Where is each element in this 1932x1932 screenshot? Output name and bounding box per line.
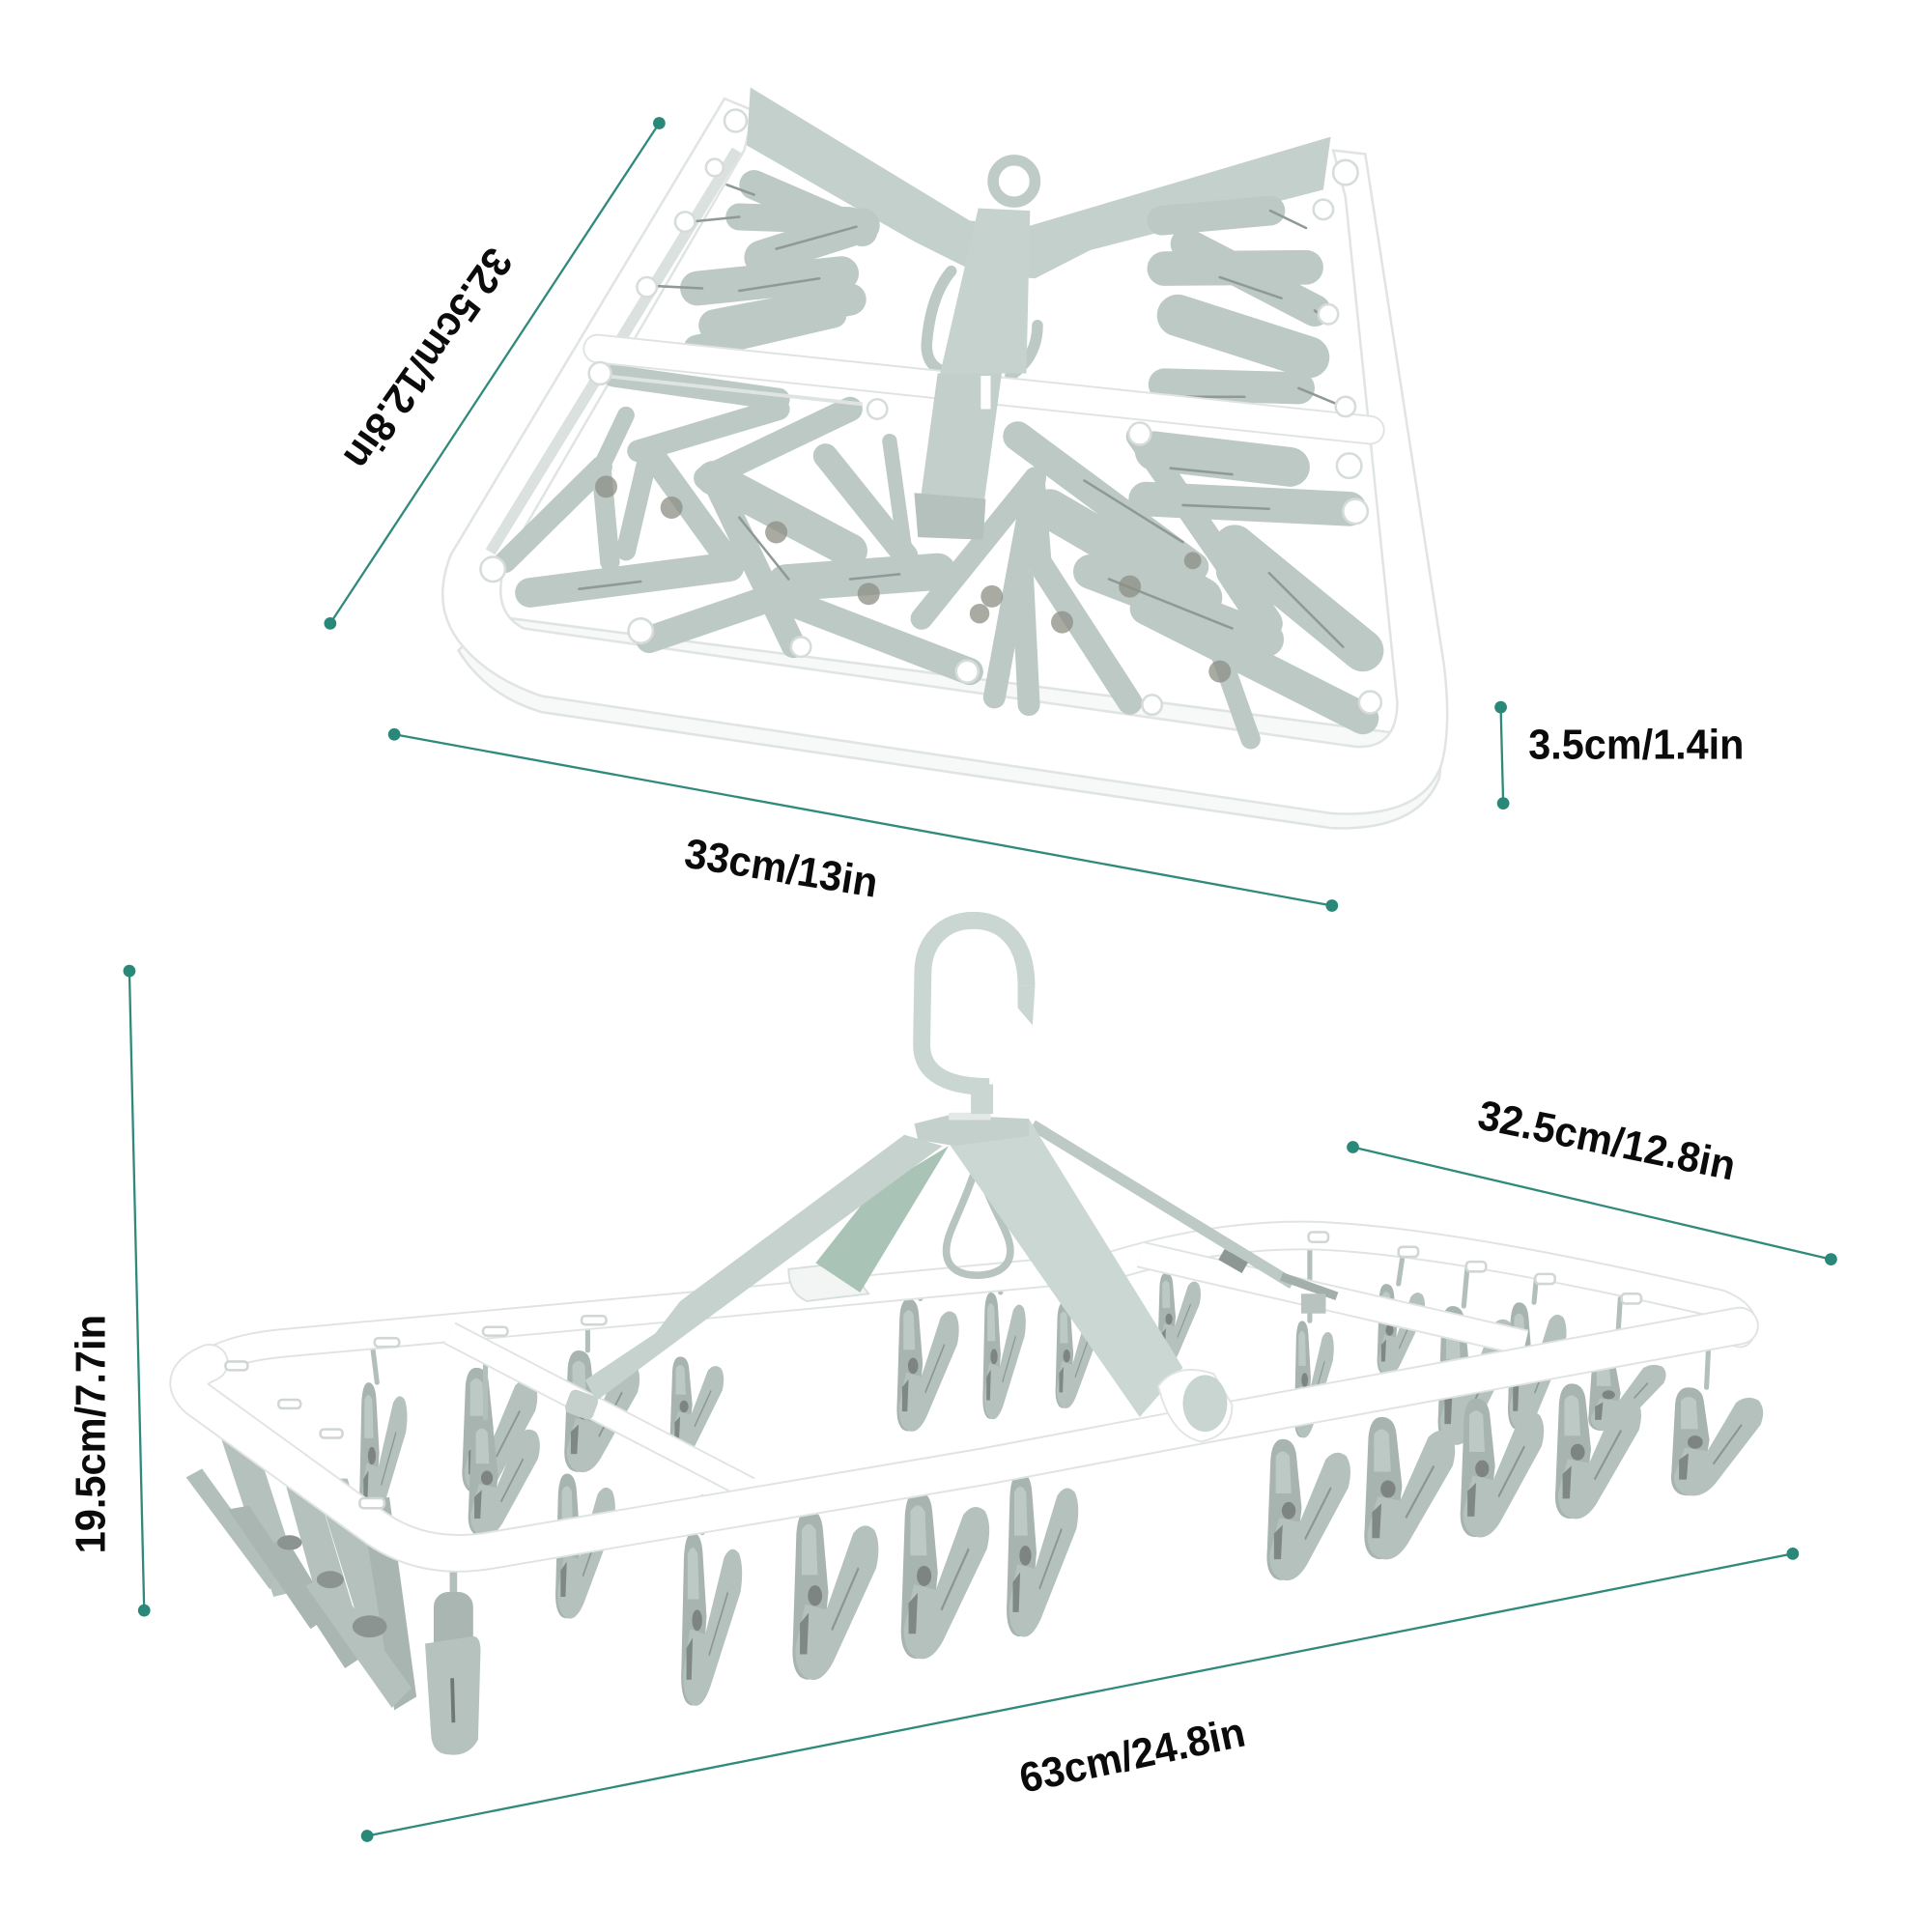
end cap on divider <box>563 1388 600 1421</box>
folded frame <box>442 99 1447 813</box>
teardrop loop <box>947 1164 1010 1275</box>
product: folded hanger (top) <box>442 88 1447 828</box>
large hook <box>922 921 1035 1114</box>
left side clips <box>186 1430 416 1710</box>
divider bars <box>450 1254 1525 1489</box>
dimension: open width 63cm <box>361 1548 1799 1842</box>
back row clips <box>359 1273 1666 1536</box>
second thin rail under cross bar <box>604 376 863 404</box>
dimension: open height 19.5cm <box>68 965 151 1616</box>
thin rear arm <box>1033 1125 1337 1314</box>
lower clip tangle <box>505 376 1363 739</box>
upper left clips <box>696 185 863 348</box>
green underside arm <box>815 1146 949 1293</box>
centre folding hub <box>914 160 1035 540</box>
hub <box>914 1113 1029 1146</box>
dimension: folded width 33cm: 33cm/13in <box>681 831 881 907</box>
cross bar <box>598 349 1370 430</box>
frame back and side rails <box>191 1236 1742 1378</box>
small white hooks on folded rail <box>480 110 1381 715</box>
dimension: folded thickness 3.5cm <box>1494 701 1744 810</box>
inner left rail <box>491 151 737 552</box>
product: open hanger (bottom) <box>186 921 1763 1755</box>
frame front and left rails <box>188 1325 1740 1553</box>
dimension: open depth 32.5cm: 32.5cm/12.8in <box>1474 1093 1740 1190</box>
folded arms with wings <box>747 88 1331 278</box>
side handle behind centre bar <box>926 271 1037 376</box>
dimension: open depth 32.5cm <box>1347 1093 1837 1265</box>
upper clip slots and hooks <box>653 185 1343 407</box>
joint on back rail <box>788 1263 868 1301</box>
dimension: folded depth 32.5cm <box>324 117 666 630</box>
dimension: folded width 33cm <box>388 728 1338 912</box>
dimension: folded depth 32.5cm: 32.5cm/12.8in <box>334 240 521 478</box>
folded frame second layer <box>458 616 1444 828</box>
arm white cap <box>1158 1370 1233 1441</box>
front row clips <box>555 1383 1763 1706</box>
right front arm <box>947 1119 1182 1417</box>
clip necks <box>372 1244 1620 1418</box>
front clip necks <box>702 1337 1709 1533</box>
dimension: folded thickness 3.5cm: 3.5cm/1.4in <box>1528 723 1744 769</box>
left front arm <box>585 1135 943 1401</box>
front centre clip <box>425 1565 480 1755</box>
dimension: open height 19.5cm: 19.5cm/7.7in <box>68 1315 114 1553</box>
springs and slots in clip tangle <box>579 469 1343 683</box>
dimension: open width 63cm: 63cm/24.8in <box>1015 1709 1249 1803</box>
small rail hooks <box>225 1233 1641 1508</box>
upper right clips <box>1162 211 1315 388</box>
